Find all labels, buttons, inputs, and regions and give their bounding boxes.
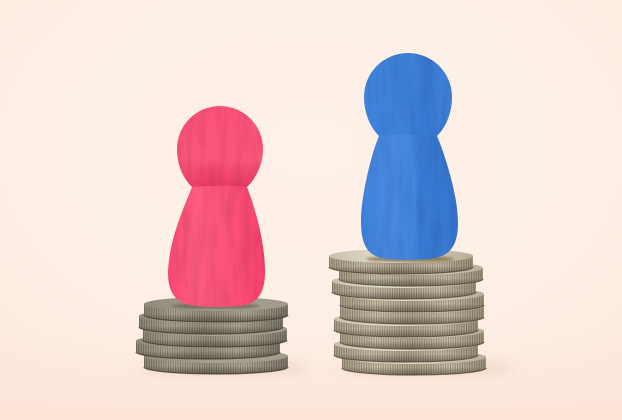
- coin stack: pink pawn, five coins: [136, 297, 288, 374]
- stack shadow on ground: [140, 361, 515, 375]
- pawn: blue: [361, 53, 458, 262]
- coin stack: blue pawn, nine coins: [329, 249, 486, 375]
- pawn: pink: [168, 106, 265, 309]
